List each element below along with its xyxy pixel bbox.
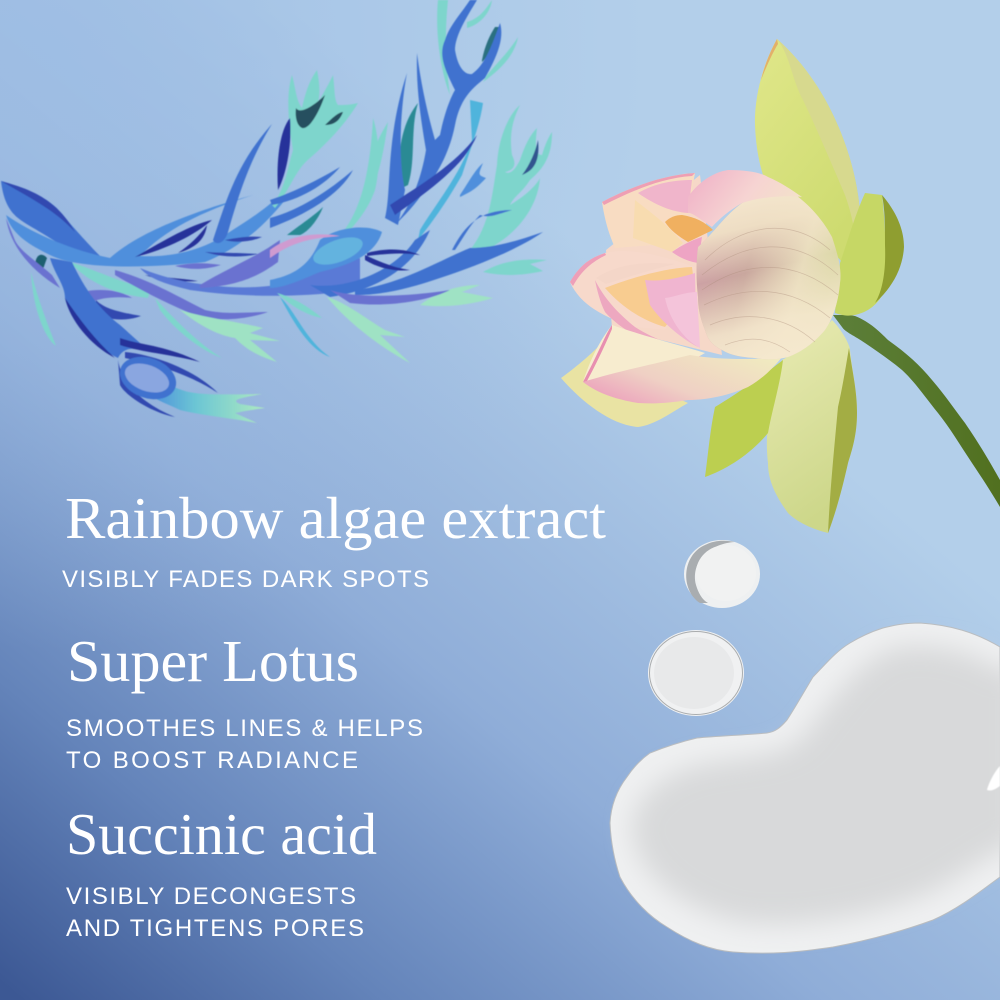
text block: rainbow algae extract: [62, 485, 607, 593]
photo: lotus flower: [561, 39, 1000, 533]
text block: super lotus: SMOOTHES LINES & HELPS: [66, 715, 423, 742]
photo: gel droplets: [610, 540, 1000, 953]
text block: succinic acid: AND TIGHTENS PORES: [66, 915, 364, 942]
text block: succinic acid: Succinic acid: [66, 801, 377, 867]
lotus petals: [570, 170, 841, 403]
algae lower bud: [114, 349, 182, 407]
large gel swatch: [610, 623, 1000, 953]
medium droplet: [648, 630, 744, 716]
text block: super lotus: [66, 628, 423, 774]
text block: succinic acid: [66, 801, 377, 942]
lotus sepals: [561, 39, 904, 533]
illustration: rainbow algae: [1, 0, 552, 423]
text block: super lotus: Super Lotus: [67, 628, 359, 694]
text block: rainbow algae extract: Rainbow algae extract: [65, 485, 607, 551]
text block: super lotus: TO BOOST RADIANCE: [66, 747, 358, 774]
algae middle bud: [270, 227, 382, 288]
text block: succinic acid: VISIBLY DECONGESTS: [66, 883, 356, 910]
small droplet: [684, 540, 760, 608]
lotus stem: [833, 315, 1000, 507]
text block: rainbow algae extract: VISIBLY FADES DARK SPOTS: [62, 566, 429, 593]
